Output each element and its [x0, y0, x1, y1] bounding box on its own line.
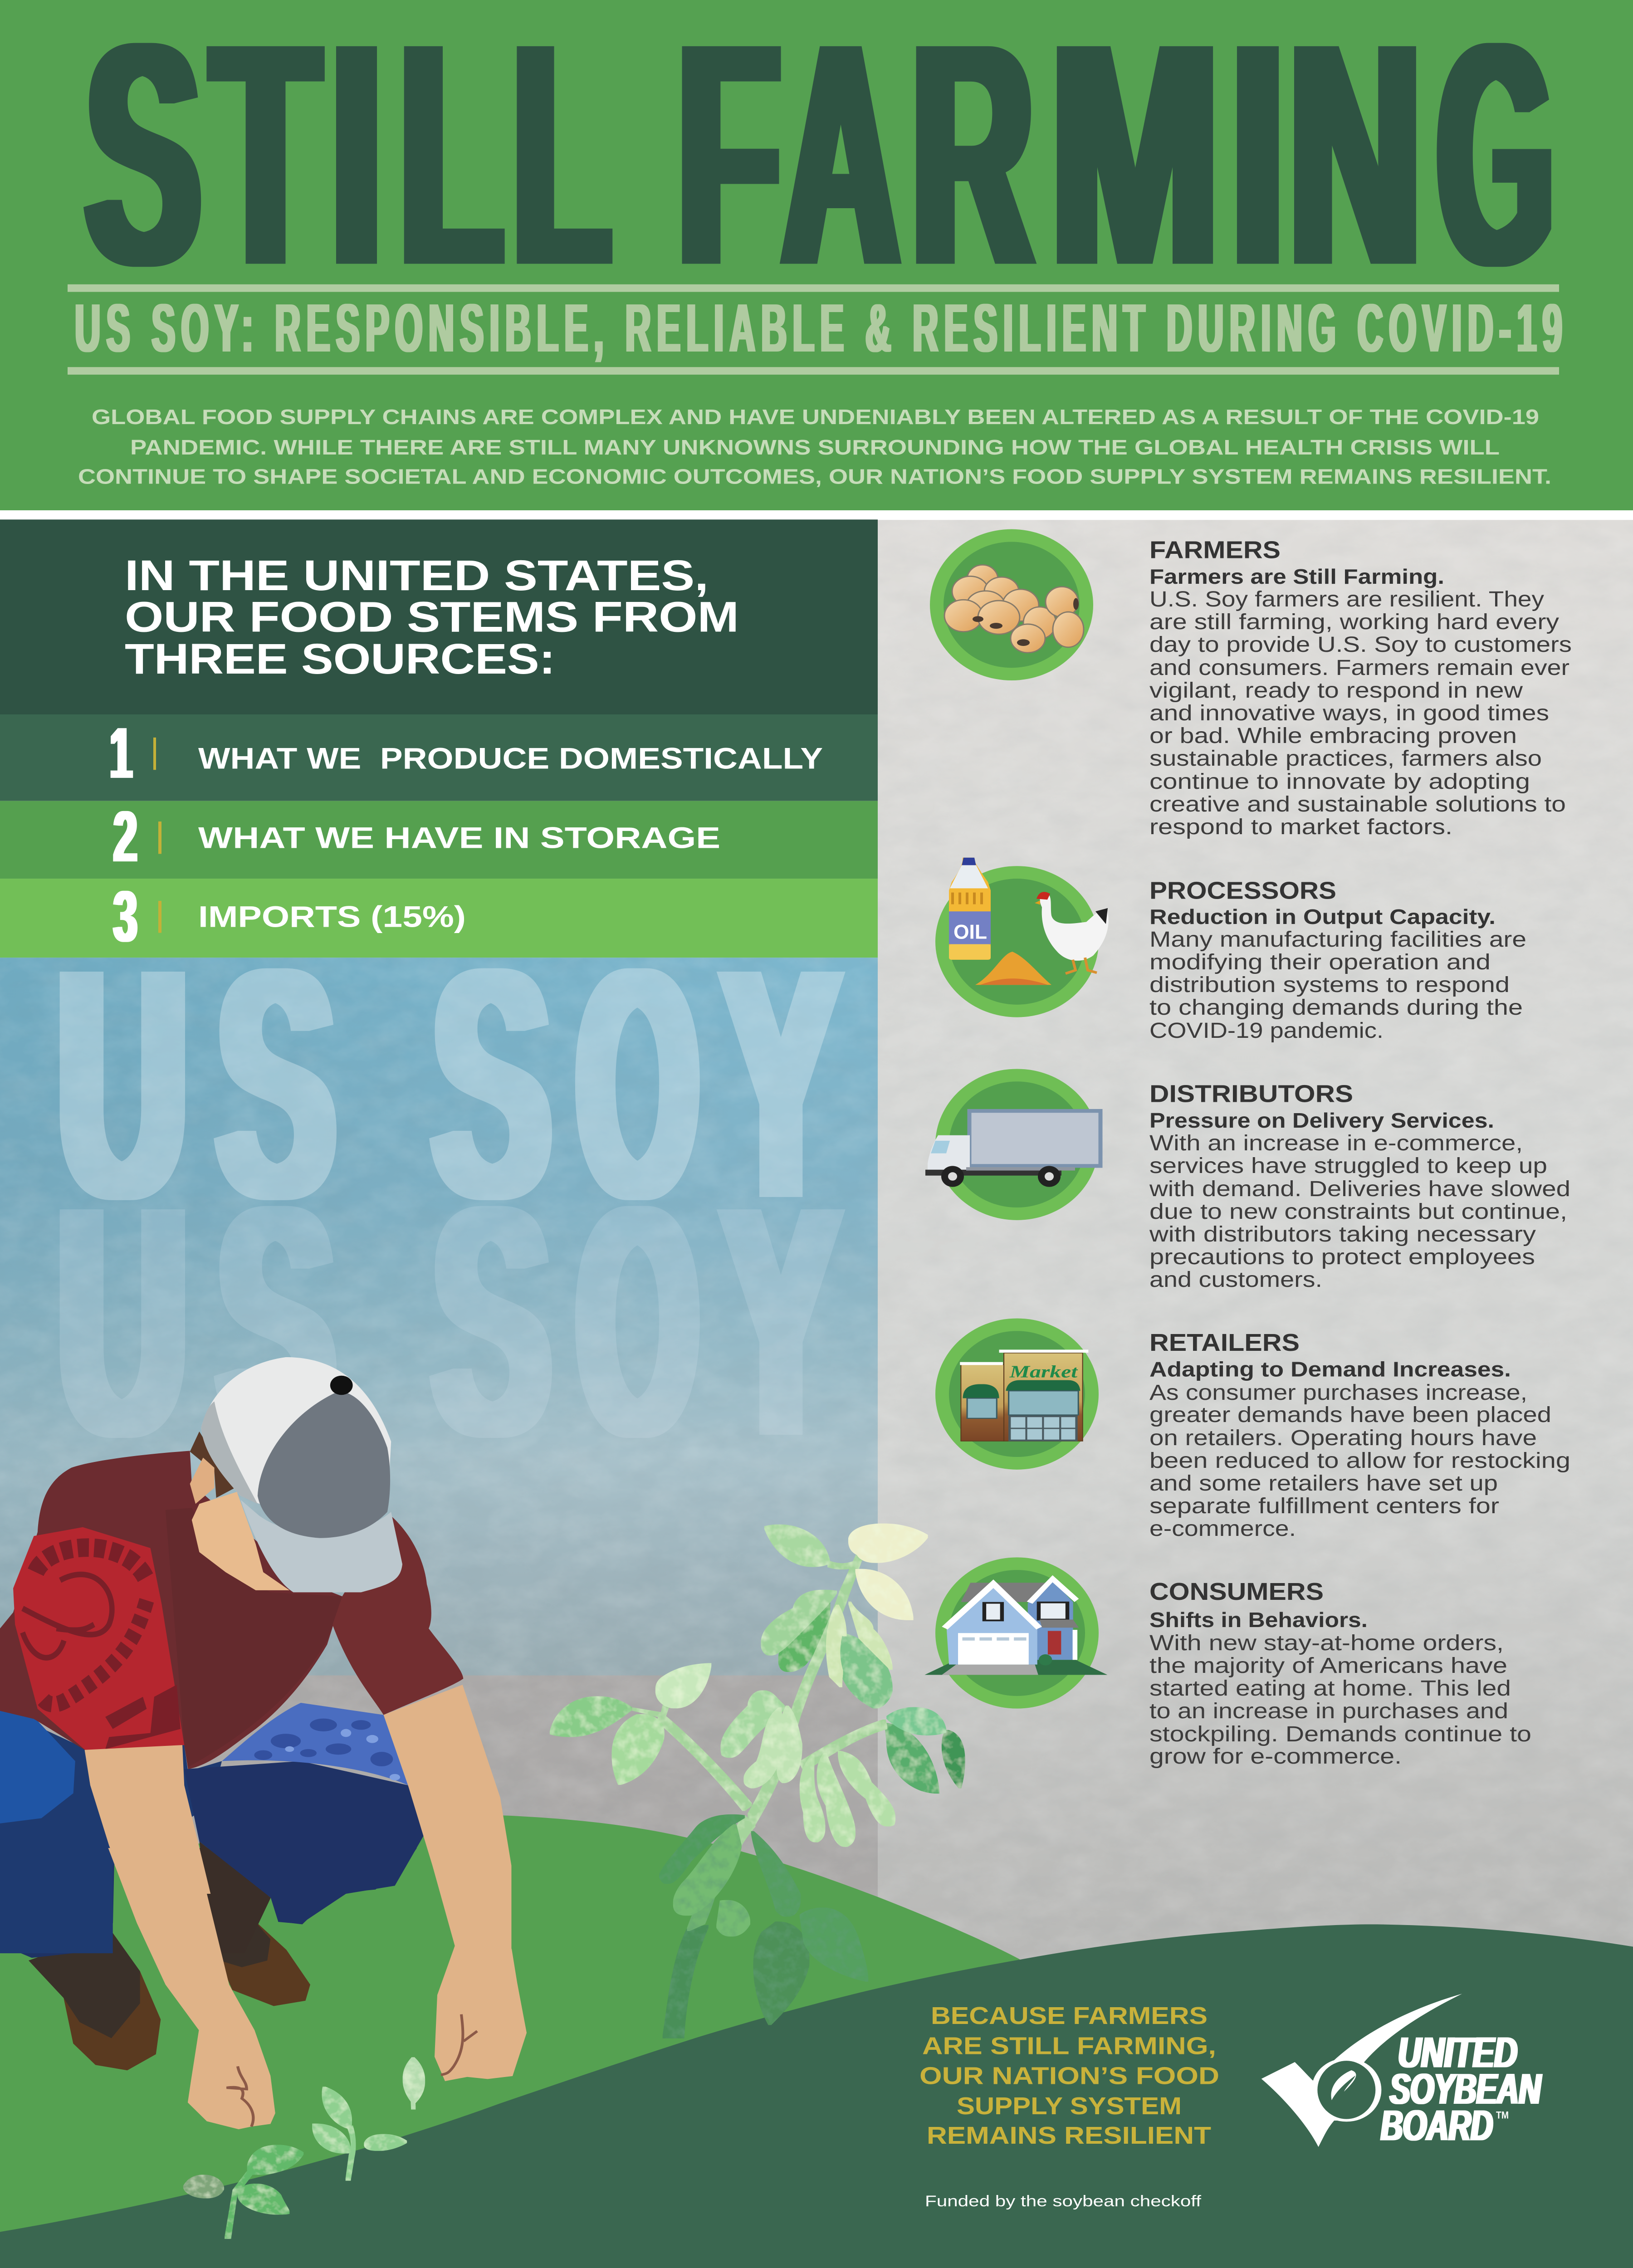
- panel: header: [0, 0, 1633, 510]
- text block: distributors: and customers.: [1149, 1267, 1322, 1292]
- title rule top: [68, 284, 1559, 292]
- title rule bottom: [68, 367, 1559, 375]
- icon: house: [924, 1557, 1107, 1709]
- green hill: [0, 1815, 1020, 2268]
- source row 2: WHAT WE HAVE IN STORAGE: [198, 821, 720, 855]
- logo: United Soybean Board: [1261, 1994, 1542, 2150]
- intro paragraph: GLOBAL FOOD SUPPLY CHAINS ARE COMPLEX AND HAVE UNDENIABLY BEEN ALTERED AS A RESULT OF THE COVID-19: [92, 406, 1539, 429]
- closing statement: ARE STILL FARMING,: [922, 2032, 1216, 2059]
- text block: distributors: With an increase in e-commerce,: [1149, 1131, 1523, 1155]
- watermark: US SOY: U: [58, 901, 187, 1267]
- closing statement: REMAINS RESILIENT: [927, 2121, 1211, 2149]
- icon: delivery truck: [925, 1069, 1100, 1220]
- oil bottle: OIL: [953, 920, 987, 943]
- text block: farmers: [1149, 536, 1572, 839]
- seedlings: [185, 2058, 424, 2238]
- text block: consumers: stockpiling. Demands continue to: [1149, 1722, 1531, 1746]
- three sources heading: THREE SOURCES:: [125, 635, 555, 683]
- farmer patterned sleeve: [13, 1527, 184, 1751]
- chicken: [1035, 892, 1109, 973]
- text block: farmers: respond to market factors.: [1149, 815, 1452, 839]
- logo wordmark: [1381, 2028, 1542, 2150]
- source row 3: 3: [113, 875, 137, 957]
- text block: consumers: Shifts in Behaviors.: [1149, 1608, 1368, 1632]
- text block: retailers: and some retailers have set up: [1149, 1471, 1498, 1496]
- farmer right fist: [435, 1942, 527, 2081]
- watermark: US SOY: U: [58, 1139, 187, 1505]
- text block: retailers: [1149, 1329, 1570, 1541]
- text block: distributors: services have struggled to keep up: [1149, 1154, 1547, 1178]
- text block: consumers: grow for e-commerce.: [1149, 1744, 1402, 1769]
- text block: consumers: the majority of Americans have: [1149, 1653, 1507, 1678]
- text block: processors: modifying their operation and: [1149, 950, 1491, 974]
- farmer legs and boots: [0, 1848, 417, 2070]
- intro paragraph: PANDEMIC. WHILE THERE ARE STILL MANY UNKNOWNS SURROUNDING HOW THE GLOBAL HEALTH CRISIS WILL: [130, 436, 1500, 459]
- farmer left arm and fist: [108, 1848, 275, 2129]
- closing statement: SUPPLY SYSTEM: [957, 2092, 1182, 2120]
- text block: consumers: to an increase in purchases and: [1149, 1699, 1508, 1723]
- text block: consumers: started eating at home. This led: [1149, 1676, 1511, 1701]
- logo check mark: [1261, 1994, 1462, 2147]
- plant upper leaves: [766, 1526, 829, 1566]
- text block: retailers: Adapting to Demand Increases.: [1149, 1358, 1511, 1381]
- watermark: US SOY: O: [578, 901, 697, 1267]
- text block: farmers: sustainable practices, farmers also: [1149, 746, 1542, 771]
- text block: processors: PROCESSORS: [1149, 876, 1336, 904]
- farmer torso shirt: [0, 1451, 342, 1769]
- closing statement: OUR NATION’S FOOD: [919, 2062, 1219, 2089]
- source row 1: [0, 713, 878, 801]
- text block: distributors: with distributors taking necessary: [1149, 1222, 1536, 1246]
- text block: distributors: [1149, 1080, 1570, 1292]
- three sources heading: IN THE UNITED STATES,: [125, 551, 709, 599]
- three sources heading: [125, 551, 739, 683]
- watermark: US SOY: S: [218, 901, 334, 1267]
- text block: farmers: U.S. Soy farmers are resilient. They: [1149, 587, 1544, 611]
- source row 2: 2: [113, 796, 137, 877]
- source row 3: IMPORTS (15%): [198, 900, 466, 934]
- source row 3: [0, 875, 878, 958]
- plant lower dark foliage: [660, 1816, 867, 2037]
- plant upper foliage: [551, 1525, 964, 1867]
- text block: consumers: [1149, 1578, 1531, 1769]
- farmer neck and ear: [192, 1492, 289, 1590]
- text block: distributors: DISTRIBUTORS: [1149, 1080, 1353, 1107]
- intro paragraph: [78, 406, 1551, 489]
- three sources heading: OUR FOOD STEMS FROM: [125, 593, 739, 641]
- watermark: US SOY: O: [578, 1139, 697, 1505]
- source row 1: WHAT WE PRODUCE DOMESTICALLY: [198, 742, 823, 775]
- text block: processors: to changing demands during the: [1149, 995, 1523, 1020]
- text block: retailers: been reduced to allow for restocking: [1149, 1448, 1570, 1473]
- text block: retailers: RETAILERS: [1149, 1329, 1300, 1356]
- icon: oil bottle, chicken and feed: [935, 858, 1109, 1017]
- watermark: US SOY: S: [218, 1139, 334, 1505]
- text block: distributors: precautions to protect employees: [1149, 1245, 1535, 1269]
- source row 2: [0, 796, 878, 879]
- text block: processors: COVID-19 pandemic.: [1149, 1018, 1384, 1043]
- dark green wave: [0, 1924, 1633, 2268]
- icon: market store: Market: [1009, 1362, 1078, 1382]
- text block: farmers: day to provide U.S. Soy to customers: [1149, 632, 1572, 657]
- text block: retailers: e-commerce.: [1149, 1516, 1296, 1541]
- panel: three sources: [0, 519, 878, 958]
- text block: farmers: or bad. While embracing proven: [1149, 723, 1517, 748]
- logo wordmark: UNITED: [1398, 2028, 1517, 2077]
- plant right pods and leaves: [801, 1752, 894, 1846]
- text block: retailers: As consumer purchases increase,: [1149, 1380, 1527, 1405]
- logo wordmark: BOARD: [1381, 2102, 1493, 2150]
- icon: market store: [935, 1318, 1099, 1470]
- source row 1: 1: [110, 713, 132, 793]
- text block: farmers: and innovative ways, in good times: [1149, 701, 1549, 725]
- farmer right arm upper: [384, 1685, 511, 1953]
- logo wordmark: SOYBEAN: [1390, 2065, 1542, 2113]
- text block: retailers: on retailers. Operating hours have: [1149, 1426, 1537, 1450]
- plant left leaves: [551, 1697, 631, 1735]
- text block: processors: distribution systems to respond: [1149, 973, 1510, 997]
- watermark: US SOY: S: [433, 1139, 550, 1505]
- text block: processors: Reduction in Output Capacity.: [1149, 905, 1496, 929]
- text block: farmers: vigilant, ready to respond in new: [1149, 678, 1523, 703]
- text block: farmers: continue to innovate by adopting: [1149, 769, 1530, 793]
- text block: farmers: creative and sustainable solutions to: [1149, 792, 1566, 816]
- title: [86, 0, 1553, 331]
- intro paragraph: CONTINUE TO SHAPE SOCIETAL AND ECONOMIC OUTCOMES, OUR NATION’S FOOD SUPPLY SYSTEM REMAINS RESILIENT.: [78, 465, 1551, 489]
- infographic canvas: Y: [723, 1139, 839, 1505]
- text block: farmers: FARMERS: [1149, 536, 1281, 563]
- text block: farmers: and consumers. Farmers remain ever: [1149, 655, 1569, 680]
- farmer cap: [201, 1357, 391, 1512]
- text block: farmers: are still farming, working hard every: [1149, 610, 1559, 634]
- text block: processors: [1149, 876, 1526, 1043]
- oil bottle: [949, 858, 991, 960]
- panel: sky background: [0, 958, 878, 1995]
- text block: distributors: with demand. Deliveries have slowed: [1149, 1177, 1570, 1201]
- text block: retailers: greater demands have been placed: [1149, 1403, 1551, 1427]
- panel: grey textured background: [878, 520, 1633, 1990]
- closing statement: [919, 2002, 1219, 2149]
- plant upper pods: [762, 1591, 836, 1654]
- text block: consumers: CONSUMERS: [1149, 1578, 1324, 1605]
- subtitle: US SOY: RESPONSIBLE, RELIABLE & RESILIENT DURING COVID-19: [75, 290, 1562, 367]
- funding note: Funded by the soybean checkoff: [925, 2192, 1201, 2210]
- text block: consumers: With new stay-at-home orders,: [1149, 1631, 1504, 1655]
- illustration: soybean plant: [551, 1525, 964, 2037]
- logo trademark: TM: [1496, 2109, 1509, 2121]
- text block: processors: Many manufacturing facilities are: [1149, 927, 1526, 952]
- feed pile: [975, 952, 1051, 985]
- closing statement: BECAUSE FARMERS: [931, 2002, 1208, 2029]
- watermark: US SOY: [58, 901, 839, 1505]
- text block: farmers: Farmers are Still Farming.: [1149, 565, 1444, 589]
- infographic canvas: Y: [723, 901, 839, 1267]
- plant stems: [631, 1554, 886, 1867]
- icon: soybeans: [930, 529, 1093, 680]
- plant middle pods: [722, 1691, 784, 1756]
- watermark: US SOY: S: [433, 901, 550, 1267]
- text block: distributors: due to new constraints but continue,: [1149, 1199, 1567, 1224]
- illustration: farmer: [0, 1357, 527, 2129]
- farmer left arm upper: [85, 1745, 210, 1894]
- text block: distributors: Pressure on Delivery Services.: [1149, 1109, 1494, 1133]
- text block: retailers: separate fulfillment centers for: [1149, 1494, 1499, 1518]
